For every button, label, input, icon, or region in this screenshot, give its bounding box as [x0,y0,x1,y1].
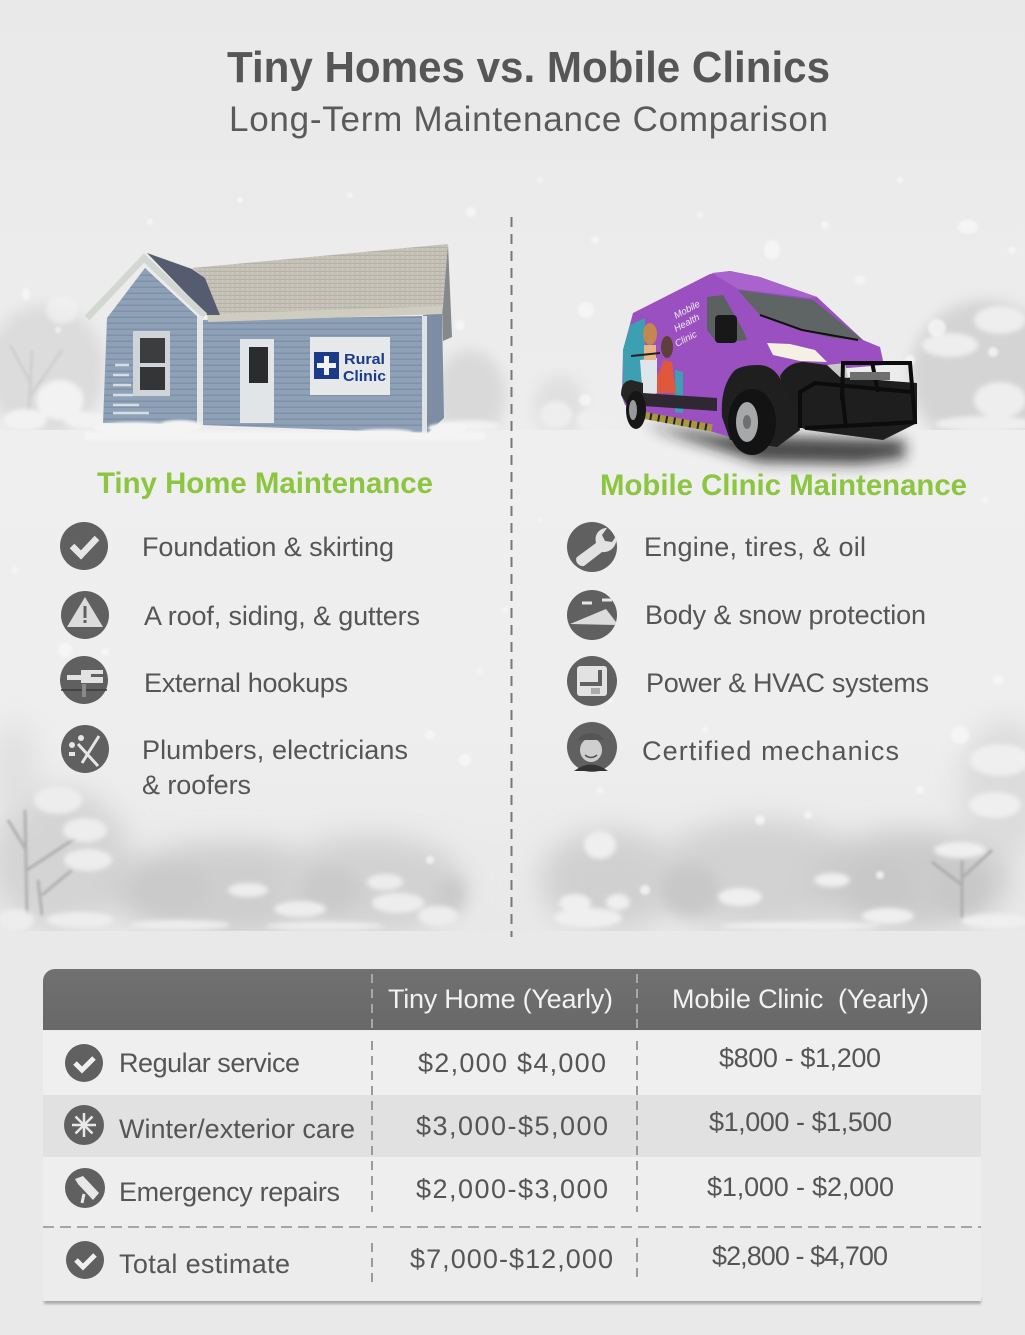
house corner trim [422,316,427,434]
table column rules [372,974,637,1284]
icon: mechanic [567,722,617,772]
text: plumbers: & roofers [142,770,251,800]
value: mobile emergency: $1,000 - $2,000 [707,1172,894,1202]
list: mobile clinic maintenance items [567,522,929,772]
clinic sign: Rural [344,351,385,368]
icon: hookups [60,656,108,704]
title: Tiny Homes vs. Mobile Clinics [227,43,830,92]
subtitle: Long-Term Maintenance Comparison [229,100,828,139]
table row: emergency [43,1157,981,1227]
illustration: purple mobile clinic van [621,271,917,464]
house side wall [423,313,444,434]
van side lettering [672,299,702,350]
van front black bumper [780,362,917,440]
value: tiny emergency: $2,000-$3,000 [416,1174,608,1204]
icon: power panel [567,656,617,706]
van front wheel [728,389,776,455]
row label: regular service: Regular service [119,1048,300,1078]
icon: check total [66,1241,104,1279]
header: mobile clinic: Mobile Clinic (Yearly) [672,984,929,1014]
van front wheel arch [722,365,800,447]
van mirror [715,315,737,343]
text: power: Power & HVAC systems [646,668,929,698]
winter scene: upper left trees [0,296,506,440]
van bar lights [850,372,890,380]
van grille chrome [827,363,848,378]
van roof highlight [712,271,817,298]
value: mobile winter: $1,000 - $1,500 [709,1107,892,1137]
house gable wall [103,268,198,425]
house fascia [207,306,443,322]
value: tiny total: $7,000-$12,000 [410,1244,613,1274]
illustration: rural clinic tiny home [85,244,485,440]
snowy ground: upper [0,430,1025,931]
house gable corner trim [197,316,203,426]
van rear teal panel [623,318,645,397]
text: plumbers [142,735,408,800]
table bottom shadow [44,1298,981,1304]
house gable slope roof [147,253,220,315]
van step stripes [642,415,712,428]
text: body: Body & snow protection [645,600,926,630]
value: tiny winter: $3,000-$5,000 [416,1111,608,1141]
house sunlit slats [113,365,149,413]
text: hookups: External hookups [144,668,348,698]
list: tiny home maintenance items [60,522,420,800]
van step bar [642,415,712,428]
van side sill [643,393,717,411]
clinic sign [310,337,390,395]
snowy ground: lower [0,931,1025,1335]
house main roof [192,244,448,315]
value: mobile total: $2,800 - $4,700 [712,1241,888,1271]
house side roof edge [442,244,452,341]
row label: emergency repairs: Emergency repairs [119,1177,340,1207]
van headlight [767,343,827,362]
text: plumbers: Plumbers, electricians [142,735,408,765]
clinic sign: Clinic [343,368,386,385]
table row: winter care [43,1095,981,1157]
van rear bumper [621,380,643,414]
text: mechanics: Certified mechanics [642,736,899,766]
table total dashed rule [43,1226,981,1228]
table row: regular service [43,1031,981,1095]
van windshield [738,290,863,340]
value: mobile regular: $800 - $1,200 [719,1043,881,1073]
winter scene: lower right forest [540,720,1025,930]
van bull bar [800,362,917,428]
van ground shadow [645,425,905,464]
van side lettering: Health [672,312,702,335]
icon: check regular [65,1044,103,1082]
header: tiny home: Tiny Home (Yearly) [388,984,613,1014]
van rear wheel [626,391,646,429]
heading: tiny home maintenance: Tiny Home Maintenance [97,467,433,500]
center dashed divider [510,217,512,937]
winter scene: upper right trees [534,300,1025,450]
house gable trim [87,258,205,318]
house main wall [202,316,423,433]
value: tiny regular: $2,000 $4,000 [418,1048,606,1078]
van side window [707,295,747,343]
van people mural [631,323,676,400]
van wipers [760,315,858,340]
van body [622,271,884,440]
icon: snow hill [567,590,617,640]
text: engine: Engine, tires, & oil [644,532,866,562]
table row: total [43,1227,981,1301]
van side lettering: Mobile [672,299,702,322]
table header [43,969,981,1030]
icon: repairs [65,1168,105,1208]
house window [133,331,170,396]
comparison table [43,969,981,1304]
row label: total estimate: Total estimate [119,1249,290,1279]
icon: snowflake [64,1105,104,1145]
icon: wrench [567,522,617,572]
icon: check [60,522,108,570]
snow at house base [85,420,485,440]
row label: winter care: Winter/exterior care [119,1114,355,1144]
text: foundation: Foundation & skirting [142,532,394,562]
van side lettering: Clinic [673,329,699,350]
icon: tools [61,725,109,773]
icon: warning [61,591,109,639]
text: roof: A roof, siding, & gutters [144,601,420,631]
house door [240,339,274,423]
heading: mobile clinic maintenance: Mobile Clinic Maintenance [600,469,967,502]
van teal strip [675,370,683,413]
winter scene: lower left forest [0,720,466,938]
falling snow [12,177,1016,895]
